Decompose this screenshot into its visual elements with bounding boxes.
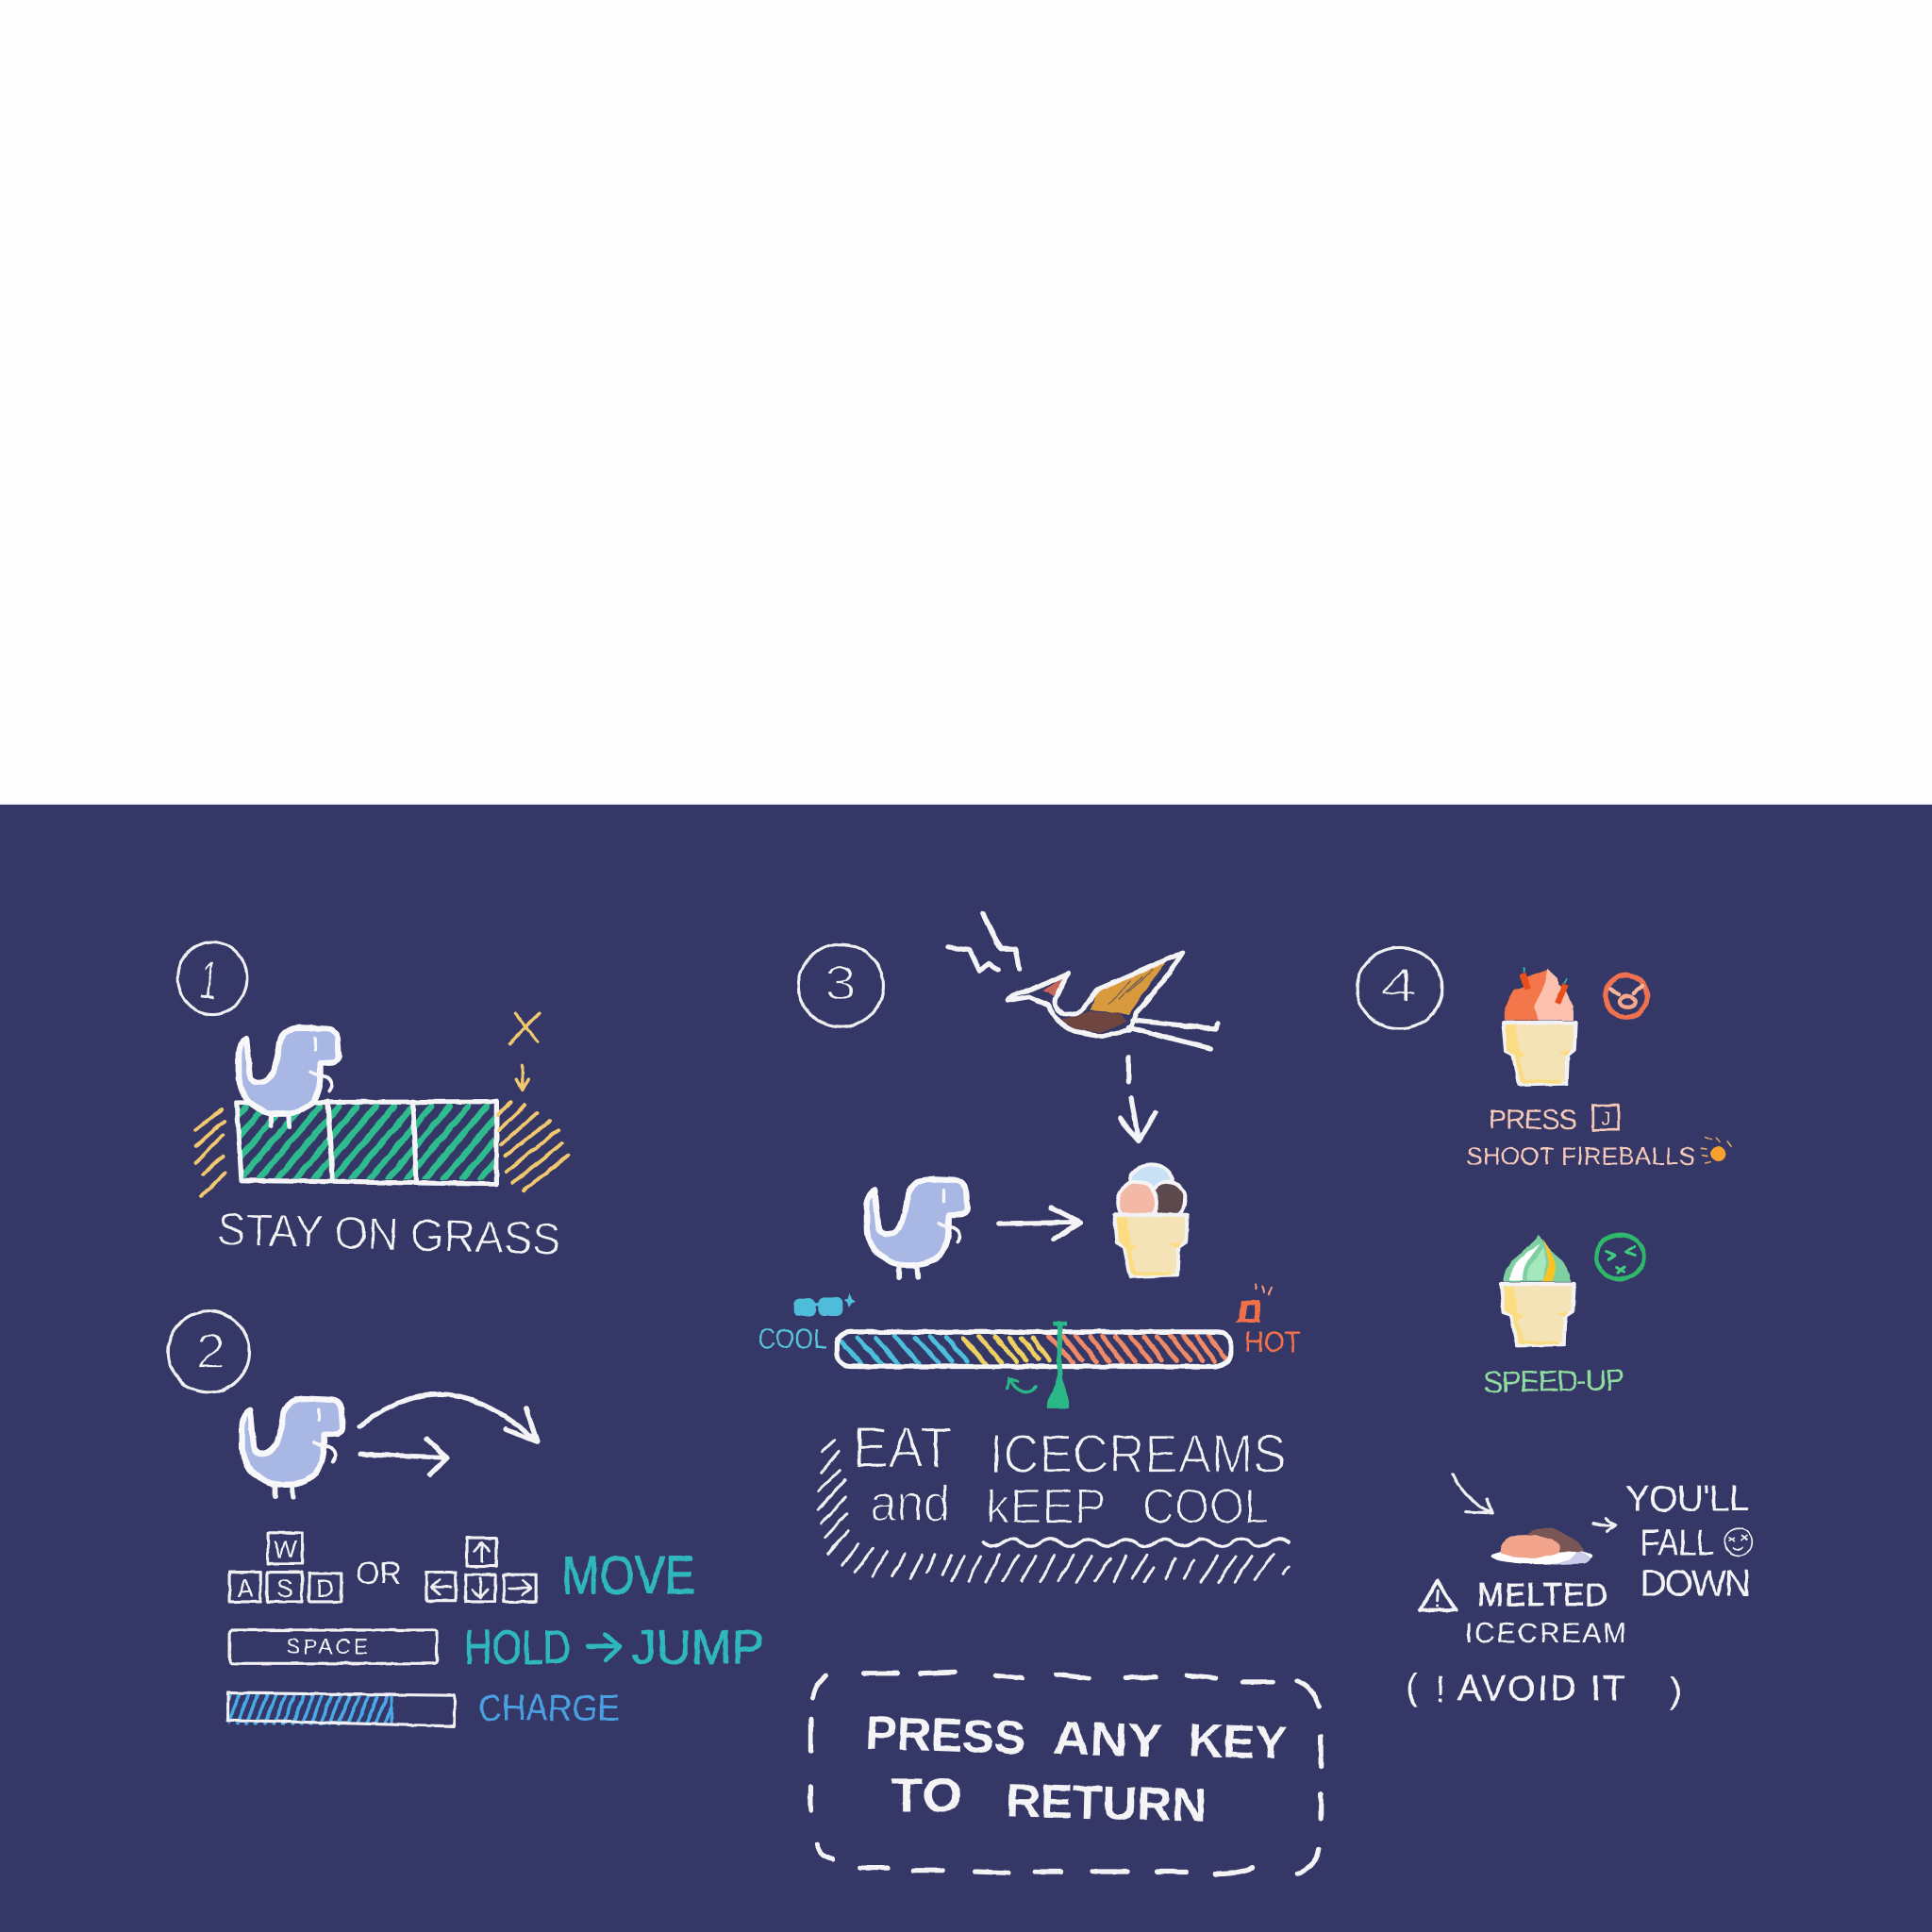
icon: dino xyxy=(242,1398,342,1497)
text: icecream: ICECREAM xyxy=(1465,1618,1626,1649)
icon: warning triangle xyxy=(1420,1581,1456,1610)
icon: sunglasses xyxy=(793,1292,855,1316)
text: eat icecreams xyxy=(853,1416,1287,1485)
icon: speed icecream xyxy=(1502,1235,1574,1345)
background: navy panel xyxy=(0,805,1932,1932)
icon: hot thermometer xyxy=(1236,1284,1272,1322)
background: white upper area xyxy=(0,0,1932,805)
step number 1 xyxy=(178,942,247,1015)
arrow: jump arc xyxy=(359,1394,537,1441)
arrow: yellow down xyxy=(516,1066,528,1091)
keys: wasd: S xyxy=(276,1574,292,1603)
text: down: DOWN xyxy=(1640,1563,1751,1604)
text: press any key to return: TO xyxy=(891,1769,962,1822)
text: avoid it note: AVOID IT xyxy=(1457,1669,1625,1708)
text: avoid it note: ) xyxy=(1670,1671,1682,1711)
text: eat icecreams: ICECREAMS xyxy=(990,1424,1287,1485)
text: melted: MELTED xyxy=(1477,1577,1607,1613)
icon: dino on grass xyxy=(239,1027,339,1126)
grass platform xyxy=(234,1098,500,1187)
arrow: green back xyxy=(1007,1379,1036,1391)
step number 3 xyxy=(798,944,883,1027)
step number 4: 4 xyxy=(1380,958,1417,1013)
icon: pterodactyl xyxy=(1008,953,1217,1049)
arrow: dino to icecream xyxy=(999,1208,1080,1240)
panel: step 4 special icecreams xyxy=(1357,947,1752,1711)
hatch: yellow danger left xyxy=(196,1109,225,1196)
icon: melted icecream xyxy=(1491,1528,1592,1565)
key: space: SPACE xyxy=(287,1635,368,1658)
keys: wasd: W xyxy=(274,1535,297,1563)
icon: yellow x xyxy=(510,1013,540,1043)
bar: charge xyxy=(218,1693,455,1726)
text: hold jump xyxy=(464,1620,764,1674)
text: avoid it note: ! xyxy=(1436,1670,1446,1710)
text: charge: CHARGE xyxy=(478,1688,620,1728)
icon: dizzy face xyxy=(1725,1528,1752,1556)
icon: squawk lines xyxy=(947,914,1019,971)
text: and keep cool: COOL xyxy=(1142,1479,1269,1534)
icon: three scoop icecream xyxy=(1114,1164,1187,1276)
step number 3: 3 xyxy=(824,956,857,1010)
text: eat icecreams: EAT xyxy=(853,1416,953,1481)
arrow: melted to fall xyxy=(1593,1518,1615,1532)
illustration layer xyxy=(168,914,1752,1874)
icon: happy speed face xyxy=(1596,1235,1644,1279)
arrow: down to melted xyxy=(1453,1474,1492,1513)
icon: fireball xyxy=(1702,1138,1731,1163)
text: or: OR xyxy=(356,1555,402,1590)
gauge: temperature xyxy=(837,1332,1231,1366)
text: you'll: YOU'LL xyxy=(1625,1478,1750,1519)
panel: step 3 eat icecreams xyxy=(758,914,1321,1874)
text: and keep cool: kEEP xyxy=(986,1479,1107,1534)
key: j xyxy=(1593,1106,1619,1130)
step number 4 xyxy=(1357,947,1442,1029)
step number 1: 1 xyxy=(196,950,222,1012)
step number 2: 2 xyxy=(196,1324,225,1379)
text: press any key to return: ANY xyxy=(1052,1711,1163,1768)
text: shoot fireballs: SHOOT FIREBALLS xyxy=(1466,1141,1695,1170)
wavy underline xyxy=(983,1539,1289,1546)
text: avoid it note: ( xyxy=(1406,1667,1418,1707)
arrow: move straight xyxy=(361,1440,447,1474)
icon: angry face xyxy=(1606,975,1647,1017)
keys: wasd: A xyxy=(237,1574,254,1603)
text: press any key to return xyxy=(865,1706,1288,1832)
hatch: white text shadow xyxy=(818,1441,1289,1582)
text: speed-up: SPEED-UP xyxy=(1483,1363,1625,1399)
text: and keep cool: and xyxy=(870,1474,950,1532)
text: press any key to return: KEY xyxy=(1188,1713,1288,1770)
text: stay on grass: STAY ON GRASS xyxy=(217,1204,561,1265)
text: hold jump: JUMP xyxy=(632,1620,764,1674)
step number 2 xyxy=(168,1311,249,1392)
key: space xyxy=(230,1630,437,1663)
text: press: PRESS xyxy=(1489,1105,1577,1135)
dashed button frame xyxy=(810,1672,1321,1874)
text: cool: COOL xyxy=(758,1324,826,1355)
panel: step 2 controls xyxy=(168,1311,764,1728)
icon: fire icecream xyxy=(1503,967,1576,1084)
key: j: J xyxy=(1602,1108,1610,1129)
text: move: MOVE xyxy=(562,1545,695,1605)
text: hot: HOT xyxy=(1244,1325,1301,1358)
icon: green pointer xyxy=(1047,1322,1070,1408)
hatch: yellow danger right xyxy=(498,1102,568,1191)
text: and keep cool xyxy=(870,1474,1269,1534)
text: fall: FALL xyxy=(1640,1523,1714,1563)
text: hold jump: HOLD xyxy=(464,1620,571,1674)
text: press any key to return: PRESS xyxy=(865,1706,1026,1764)
panel: step 1 stay on grass xyxy=(178,942,568,1265)
text: avoid it note xyxy=(1406,1667,1682,1711)
arrow: drops down xyxy=(1120,1058,1156,1141)
keys: wasd: D xyxy=(316,1574,334,1603)
text: press any key to return: RETURN xyxy=(1006,1774,1208,1832)
icon: dino xyxy=(867,1179,967,1277)
keys: wasd xyxy=(230,1533,341,1603)
keys: arrows xyxy=(426,1538,536,1602)
